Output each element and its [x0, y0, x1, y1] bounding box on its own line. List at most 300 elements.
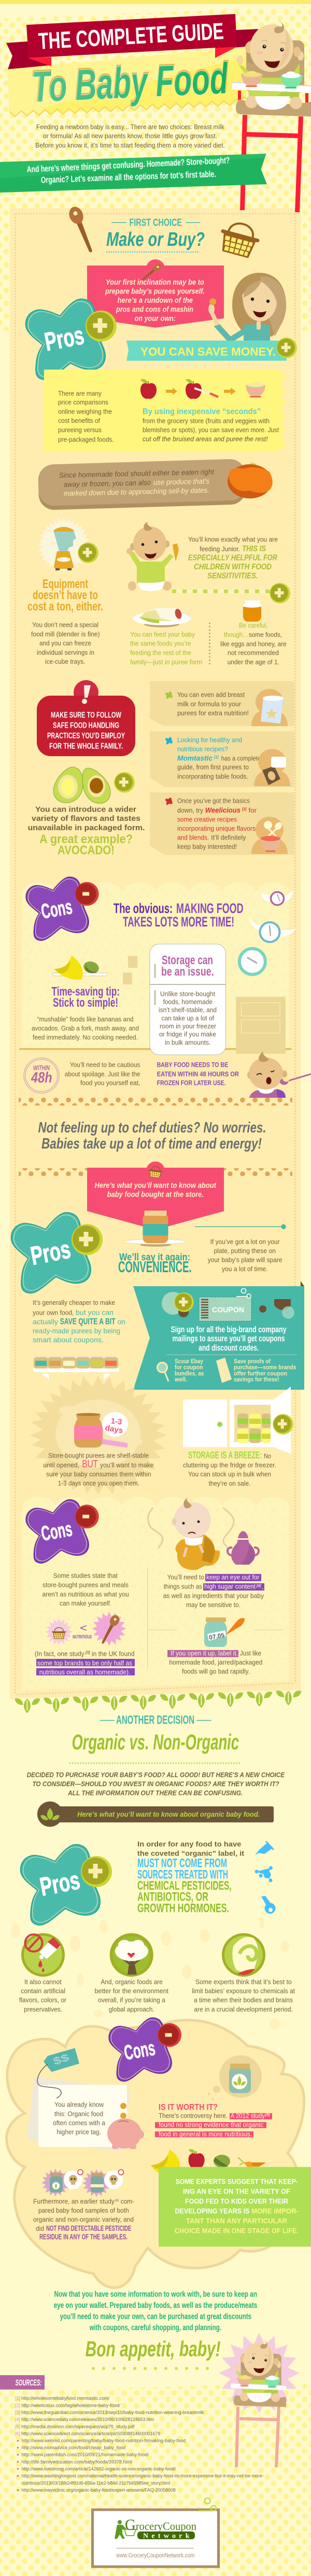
- text: same foods: [130, 631, 202, 666]
- text: food sensitivities: feeding Junior.: [200, 546, 240, 553]
- panel: saving money with seconds: By using inexpensive “seconds”: [143, 407, 261, 416]
- text: is it worth it: There’s controversy here.: [159, 2112, 228, 2119]
- illustration: mom: [208, 273, 286, 342]
- text: is it worth it: [155, 2102, 272, 2138]
- tip box: weelicious: down, try: [177, 807, 204, 814]
- icons: chemical syringe molecule flask: [255, 1841, 276, 1914]
- sources list: http://www.webmd.com/parenting/baby/baby-food-nutrition-9/making-baby-food: [22, 2438, 186, 2443]
- sources list: http://www.sciencedaily.com/releases/2010/06/100628124653.htm: [21, 2417, 154, 2422]
- panel: variety callout: DEVELOPING YEARS IS: [175, 2206, 249, 2215]
- tip box: weelicious: [150, 792, 294, 855]
- panel: variety callout: [151, 2149, 311, 2247]
- text: organic label rules: ANTIBIOTICS, OR: [137, 1890, 208, 1904]
- sources list: http://www.mayoclinic.org/organic-baby-food/expert-answers/FAQ-20058008: [22, 2487, 176, 2493]
- text: sugar content: [4]: [256, 1584, 261, 1588]
- text: save with coupons: on: [118, 1317, 125, 1326]
- panel: saving money with seconds: cost benefits of: [58, 417, 101, 424]
- sources list: http://www.parentdish.com/2010/09/21/homemade-baby-food/: [22, 2452, 149, 2457]
- text: storage is a breeze: No: [264, 1453, 271, 1460]
- text: proofs of purchase: [234, 1359, 296, 1383]
- text: time-saving tip: Stick to simple!: [53, 996, 118, 1010]
- tip box: breast milk: You can even add breast: [177, 691, 245, 699]
- heading: bon appetit: Bon appetit, baby!: [86, 2337, 221, 2361]
- tip box: momtastic: [150, 731, 294, 787]
- sources tab: [0, 2375, 45, 2390]
- heading: not feeling up to chef duties: [38, 1120, 266, 1152]
- text: organic benefits: are in a crucial development period.: [194, 2006, 293, 2013]
- illustration: pantry cupboard: [183, 1387, 293, 1454]
- text: be careful: though...: [224, 631, 248, 639]
- text: storage is a breeze: You can stock up in bulk when: [188, 1471, 271, 1478]
- note: higher price: this: Organic food: [54, 2110, 103, 2117]
- text: convenience: your baby’s plate will spare: [208, 1257, 282, 1264]
- icon: spoon: [67, 204, 97, 255]
- text: storage is a breeze: [183, 1450, 276, 1487]
- panel: saving money with seconds: online weighing the: [58, 408, 112, 415]
- callout: first inclination: pros and cons of mashin: [116, 305, 193, 314]
- text: organic benefits: limit babies’ exposure to chemicals at: [192, 1988, 295, 1995]
- text: same foods: You can feed your baby: [130, 631, 195, 638]
- text: proofs of purchase: offer further coupon: [234, 1371, 287, 1377]
- pros badge 3: Pros: [37, 1865, 82, 1902]
- text: time-saving tip: [32, 984, 139, 1041]
- icon: dinner plate: [133, 608, 191, 627]
- heading: takes more time: MAKING FOOD: [176, 901, 244, 916]
- section title: first choice make or buy: [67, 204, 262, 260]
- sources list: [15, 2396, 264, 2493]
- top yellow bar: [0, 0, 311, 4]
- fridge: storage can be an issue: Storage can: [162, 953, 213, 967]
- icon: banana and avocado on plate: [53, 955, 107, 980]
- text: pesticide study: RESIDUE IN ANY OF THE SAMPLES.: [39, 2233, 128, 2242]
- text: time-saving tip: Time-saving tip:: [52, 984, 120, 998]
- tip box: breast milk: [150, 681, 294, 726]
- pros badge 3: [21, 1845, 112, 1925]
- icon: no additives: [21, 1933, 65, 1977]
- green banner: Organic? Let’s examine all the options for tot’s first table.: [40, 169, 216, 185]
- icon: nutrition comparison: <: [80, 1623, 87, 1634]
- callout: sell-by dates pill: [38, 459, 273, 510]
- cons badge 3: Cons: [122, 2037, 157, 2065]
- callout: first inclination: here’s a rundown of the: [117, 296, 193, 305]
- text: convenience: We’ll say it again:: [119, 1252, 190, 1263]
- text: save with coupons: It’s generally cheaper to make: [33, 1299, 115, 1306]
- icon: blender: [33, 513, 98, 577]
- heading: the complete guide: THE COMPLETE GUIDE: [38, 18, 224, 54]
- text: nutrition study: Some studies state that: [53, 1572, 118, 1580]
- text: same foods: the same foods you’re: [130, 640, 191, 647]
- fridge: storage can be an issue: in bulk amounts.: [165, 1039, 210, 1046]
- text: spoilage: about spoilage. Just like the: [65, 1070, 140, 1078]
- sources list: http://weelicious.com/tag/wholesome-baby-food/: [21, 2403, 120, 2408]
- text: convenience: plate, putting these on: [214, 1247, 276, 1255]
- text: spoilage: [65, 1062, 239, 1087]
- sources list: http://www.livestrong.com/article/142602-organic-vs-non-organic-baby-food/: [22, 2466, 176, 2471]
- text: scour ebay: for coupon: [175, 1365, 203, 1371]
- sources list: [2]: [15, 2403, 20, 2408]
- text: save with coupons: ready-made purees by being: [33, 1327, 120, 1335]
- badge: within 48h: WITHIN: [33, 1064, 50, 1072]
- note: higher price: often comes with a: [53, 2119, 105, 2127]
- fridge: storage can be an issue: Unlike store-bought: [160, 990, 216, 997]
- illustration: jars on shelf: [33, 1355, 119, 1380]
- text: same foods: feeding the rest of the: [130, 649, 191, 656]
- sources list: [6]: [15, 2431, 20, 2436]
- text: organic label rules: In order for any food to have: [137, 1839, 242, 1848]
- callout: first inclination: [87, 259, 224, 328]
- illustration: baby with carrot: [126, 522, 179, 591]
- logo card: [92, 2498, 219, 2567]
- text: wider variety: AVOCADO!: [58, 844, 115, 858]
- text: organic label rules: SOURCES TREATED WITH: [137, 1867, 228, 1881]
- starburst: shelf-stable jar: you’ll want to make: [100, 1462, 154, 1469]
- sources tab: SOURCES:: [16, 2378, 41, 2388]
- text: is it worth it: found no strong evidence that organic: [159, 2122, 263, 2129]
- icon: avocado: [53, 767, 135, 803]
- callout: sell-by dates pill: use produce that’s: [153, 477, 209, 487]
- text: convenience: you a lot of time.: [222, 1265, 268, 1273]
- tip box: momtastic: guide, from first purees to: [177, 764, 249, 771]
- starburst: shelf-stable jar: 1-3 days once you open them.: [58, 1480, 139, 1487]
- tip box: breast milk: purees for extra nutrition!: [177, 710, 249, 717]
- sources list: [1]: [15, 2396, 20, 2401]
- text: organic intro: [27, 1771, 285, 1797]
- text: be careful: some foods,: [249, 631, 282, 639]
- text: organic intro: DECIDED TO PURCHASE YOUR BABY’S FOOD? ALL GOOD! BUT HERE’S A NEW CHOICE: [27, 1771, 285, 1778]
- text: equipment: individual servings in: [37, 649, 94, 656]
- text: closing note: [54, 2290, 257, 2332]
- polka dot header background: [0, 6, 311, 331]
- text: organic benefits: It also cannot: [24, 1978, 62, 1985]
- section title: first choice make or buy: FIRST CHOICE: [130, 217, 182, 229]
- icon: nutrition comparison: NUTRITIOUS: [73, 1635, 92, 1640]
- text: storage is a breeze: STORAGE IS A BREEZE:: [188, 1450, 262, 1461]
- text: equipment: You don’t need a special: [32, 622, 98, 629]
- callout: first inclination: prepare baby’s purees yourself.: [105, 287, 205, 296]
- starburst: shelf-stable jar: days: [104, 1423, 124, 1435]
- text: storage is a breeze: cluttering up the fridge or freezer.: [183, 1462, 276, 1469]
- coupon: [199, 1289, 251, 1321]
- text: scour ebay: Scour Ebay: [175, 1359, 204, 1365]
- text: closing note: with coupons, careful shopping, and planning.: [89, 2323, 221, 2332]
- text: organic label rules: GROWTH HORMONES.: [137, 1901, 229, 1915]
- tip box: weelicious: incorporating unique flavors: [177, 825, 256, 832]
- text: nutrition study: some top brands to be only half as: [37, 1659, 132, 1667]
- fridge: storage can be an issue: can take up a lot of: [162, 1014, 214, 1022]
- text: sugar content: as well as ingredients that your baby: [163, 1592, 264, 1599]
- icon: price tag: [37, 2048, 79, 2098]
- section title: organic vs non-organic: [69, 1713, 241, 1763]
- text: nutrition study: [3]: [85, 1651, 90, 1655]
- text: is it worth it: IS IT WORTH IT?: [159, 2102, 218, 2112]
- text: convenience: [118, 1238, 282, 1276]
- callout: sell-by dates pill: away or frozen, you can also: [64, 478, 151, 489]
- sources list: http://life.familyeducation.com/baby/foods/39378.html: [22, 2459, 132, 2464]
- icon: price tag: $$: [52, 2052, 70, 2068]
- sources list: http://www.washingtonpost.com/national/health-science/organic-baby-food-its-more-expensive-but-it-may-not-be-more-: [22, 2474, 264, 2479]
- fridge: storage can be an issue: [150, 944, 226, 1055]
- text: food sensitivities: THIS IS: [242, 544, 266, 553]
- text: storage is a breeze: they’re on sale.: [209, 1480, 250, 1487]
- heading: to baby food: [30, 53, 230, 111]
- green banner: And here’s where things get confusing. Homemade? Store-bought?: [26, 155, 230, 174]
- icon: fridge background squares: [123, 956, 286, 1054]
- text: save with coupons: but you can: [76, 1308, 114, 1317]
- banner: you can save money: [126, 337, 297, 361]
- text: wider variety: You can introduce a wider: [35, 805, 136, 814]
- cons badge: [26, 877, 99, 940]
- text: wider variety: variety of flavors and tastes: [32, 814, 140, 823]
- text: nutrition study: aren’t as nutritious as what you: [43, 1591, 129, 1598]
- text: sugar content: ,: [262, 1583, 263, 1591]
- text: nutrition study: [35, 1572, 135, 1676]
- tip box: weelicious: some creative recipes: [177, 816, 237, 823]
- fridge: storage can be an issue: foods, homemade: [163, 998, 213, 1006]
- icon: magnifier: [158, 1362, 168, 1381]
- text: be careful: not recommended: [228, 649, 279, 656]
- icon: labeled jar: 07.05: [208, 1631, 225, 1641]
- text: organic benefits: better for the environment: [94, 1988, 169, 1995]
- text: proofs of purchase: purchase—some brands: [234, 1365, 296, 1371]
- icon: honey jar: [243, 600, 261, 622]
- illustration: sad baby: [148, 1497, 234, 1570]
- text: organic label rules: [137, 1839, 244, 1915]
- panel: variety callout: FOOD FED TO KIDS OVER THEIR: [185, 2197, 288, 2205]
- callout: store-bought: baby food bought at the store.: [107, 1190, 204, 1199]
- icon: labeled jar: [204, 1617, 245, 1647]
- panel: coupons: [133, 1281, 304, 1390]
- text: pesticide study: Furthermore, an earlier study: [33, 2198, 115, 2205]
- checked strip with plus: [172, 583, 290, 603]
- starburst: shelf-stable jar: 1-3: [110, 1417, 122, 1426]
- text: sugar content: things such as: [164, 1583, 202, 1591]
- fridge: storage can be an issue: be an issue.: [161, 965, 214, 979]
- text: nutrition study: can make yourself.: [60, 1600, 111, 1607]
- banner: you can save money: YOU CAN SAVE MONEY.: [140, 345, 276, 358]
- pros badge 1: Pros: [42, 320, 87, 357]
- text: is it worth it: [5]: [265, 2113, 270, 2117]
- tip box: weelicious: It’ll definitely: [211, 834, 246, 842]
- icon: thought bubble with organic jar: [207, 2055, 262, 2100]
- text: food sensitivities: ESPECIALLY HELPFUL FOR: [188, 553, 277, 562]
- text: sugar content: You’ll need to: [167, 1574, 204, 1581]
- logo: grocery coupon network: [115, 2515, 196, 2540]
- text: equipment: cost a ton, either.: [27, 599, 103, 613]
- starburst: shelf-stable jar: BUT: [82, 1459, 98, 1470]
- icons: fruits: [151, 2149, 266, 2174]
- tip box: momtastic: nutritious recipes?: [177, 746, 228, 753]
- starburst: shelf-stable jar: [20, 1363, 177, 1507]
- text: scour ebay: [174, 1359, 204, 1383]
- note: higher price: [27, 2048, 144, 2152]
- heading: takes more time: The obvious:: [114, 901, 173, 916]
- main panel: make or buy: [10, 208, 301, 1699]
- text: organic benefits: preservatives.: [24, 2006, 62, 2013]
- callout: safe food handling: FOR THE WHOLE FAMILY.: [49, 742, 123, 751]
- text: food sensitivities: You’ll know exactly what you are: [188, 536, 278, 543]
- icon: nutrition comparison: [46, 1612, 126, 1646]
- panel: variety callout: MORE IMPOR-: [251, 2206, 299, 2215]
- text: equipment: food mill (blender is fine): [31, 630, 100, 638]
- panel: saving money with seconds: price comparisons: [58, 399, 108, 406]
- cons badge: [26, 1500, 99, 1563]
- text: organic benefits: [19, 1978, 295, 2013]
- sources list: [5]: [15, 2424, 20, 2429]
- connector line: [195, 1224, 286, 1229]
- tip box: weelicious: keep baby interested!: [177, 843, 237, 850]
- logo: grocery coupon network: GroceryCoupon: [125, 2515, 196, 2534]
- text: same foods: family—just in puree form: [130, 658, 202, 666]
- text: sugar content: [163, 1574, 264, 1609]
- text: save with coupons: [33, 1299, 125, 1344]
- logo card: www.GroceryCouponNetwork.com: [116, 2553, 194, 2559]
- callout: store-bought: Here’s what you’ll want to know about: [94, 1181, 217, 1190]
- text: sugar content: high sugar content: [204, 1583, 256, 1591]
- callout: safe food handling: [37, 680, 135, 756]
- intro text: Feeding a newborn baby is easy... There are two choices: Breast milk: [36, 123, 224, 130]
- text: nutrition study: in the UK found: [92, 1651, 135, 1658]
- text: pesticide study: did: [36, 2225, 44, 2232]
- callout: safe food handling: SAFE FOOD HANDLING: [53, 722, 119, 730]
- tip box: momtastic: incorporating table foods.: [177, 773, 248, 780]
- pros badge 1: [26, 299, 117, 379]
- panel: variety callout: TANT THAN ANY PARTICULAR: [186, 2217, 287, 2225]
- sources list: [3]: [15, 2410, 20, 2415]
- text: time-saving tip: “mushable” foods like bananas and: [37, 1015, 134, 1023]
- text: convenience: CONVENIENCE.: [118, 1258, 192, 1276]
- cons badge: Cons: [39, 1518, 74, 1545]
- callout: first inclination: Your first inclination may be to: [106, 278, 204, 287]
- icon: baby brain: [222, 1933, 265, 1977]
- text: save with coupons: actually: [33, 1317, 58, 1326]
- tip box: momtastic: [1]: [214, 756, 219, 759]
- text: equipment: Equipment: [43, 577, 88, 591]
- tip box: breast milk: milk or formula to your: [177, 700, 241, 708]
- heading: takes more time: TAKES LOTS MORE TIME!: [123, 914, 234, 930]
- icon: receipt: [216, 1358, 232, 1383]
- text: spoilage: food you yourself eat,: [80, 1080, 140, 1087]
- text: sugar content: keep an eye out for: [206, 1574, 259, 1581]
- callout: first inclination: on your own:: [135, 314, 176, 323]
- text: be careful: [220, 622, 287, 666]
- panel: cons time: [19, 877, 296, 1056]
- text: label it: foods will go bad rapidly.: [182, 1668, 250, 1675]
- pros badge 2: [11, 1213, 103, 1293]
- text: is it worth it: A 2012 study: [231, 2112, 265, 2119]
- callout: safe food handling: MAKE SURE TO FOLLOW: [51, 711, 122, 720]
- title banner: [6, 14, 258, 117]
- text: organic benefits: overall, if you’re taking a: [98, 1997, 165, 2004]
- tip box: weelicious: Weelicious: [205, 806, 241, 814]
- text: spoilage: FROZEN FOR LATER USE.: [157, 1080, 226, 1087]
- callout: sell-by dates pill: marked down due to approaching sell-by dates.: [64, 486, 209, 497]
- intro text: [35, 123, 225, 149]
- text: organic intro: TO CONSIDER—SHOULD YOU INVEST IN ORGANIC FOODS? ARE THEY WORTH IT?: [32, 1780, 279, 1788]
- text: scour ebay: well.: [174, 1377, 187, 1383]
- sources list: http://media.dssimon.com/taperequest/acp75_study.pdf: [21, 2424, 135, 2429]
- starburst: shelf-stable jar: Store-bought purees are shelf-stable: [48, 1452, 149, 1460]
- cons badge: Cons: [39, 895, 74, 923]
- text: organic benefits: Some experts think that it’s best to: [195, 1978, 292, 1985]
- text: save with coupons: SAVE QUITE A BIT: [60, 1316, 116, 1326]
- text: organic benefits: And, organic foods are: [101, 1978, 163, 1985]
- text: save with coupons: your own food,: [33, 1309, 74, 1317]
- text: convenience: If you’ve got a lot on your: [210, 1238, 280, 1245]
- text: pesticide study: (6): [115, 2199, 119, 2202]
- text: nutrition study: (In fact, one study: [35, 1651, 84, 1658]
- text: pesticide study: pared baby food samples of both: [38, 2207, 129, 2214]
- text: sugar content: may be sensitive to.: [186, 1601, 241, 1609]
- intro text: or formula! As all new parents know, those little guys grow fast.: [43, 133, 217, 140]
- text: proofs of purchase: Save proofs of: [234, 1359, 271, 1365]
- icons: jars with skulls: [41, 2169, 123, 2197]
- section title: first choice make or buy: Make or Buy?: [106, 229, 205, 251]
- text: wider variety: A great example?: [39, 832, 133, 846]
- badge: within 48h: [24, 1058, 59, 1093]
- text: spoilage: BABY FOOD NEEDS TO BE: [157, 1062, 228, 1069]
- starburst: shelf-stable jar: until opened,: [43, 1462, 79, 1469]
- text: pesticide study: organic and non-organic variety, and: [33, 2216, 134, 2224]
- text: equipment: ice-cube trays.: [45, 658, 85, 666]
- banner: organic pill: Here’s what you’ll want to know about organic baby food.: [77, 1810, 260, 1818]
- text: label it: homemade food, jarred/packaged: [169, 1659, 262, 1666]
- illustration: baby in high chair: [232, 21, 311, 212]
- icon: piggy bank: [107, 2103, 144, 2149]
- panel: saving money with seconds: There are many: [58, 390, 102, 397]
- text: organic benefits: a time when their bodies and brains: [194, 1997, 293, 2004]
- text: wider variety: [28, 805, 145, 858]
- text: proofs of purchase: savings for these!: [234, 1377, 279, 1383]
- text: organic intro: ALL THE INFORMATION OUT THERE CAN BE CONFUSING.: [67, 1789, 243, 1797]
- heading: takes more time: [114, 901, 244, 930]
- text: organic benefits: global approach.: [109, 2006, 154, 2013]
- icon: pumpkin: [228, 462, 273, 498]
- text: equipment: doesn’t have to: [33, 588, 98, 602]
- tip box: momtastic: Momtastic: [177, 754, 213, 762]
- banner: organic pill: [37, 1801, 274, 1827]
- callout: store-bought: [87, 1161, 224, 1230]
- panel: saving money with seconds: blemishes or spots), you can save even more. Just: [143, 426, 279, 434]
- panel: variety callout: CHOICE MADE IN ONE STAGE OF LIFE.: [175, 2227, 299, 2235]
- icon: scissors: [199, 2498, 216, 2511]
- panel: saving money with seconds: from the grocery store (fruits and veggies with: [143, 417, 270, 424]
- intro text: Before you know it, it’s time to start feeding them a more varied diet.: [35, 142, 225, 149]
- polka dot footer background: [0, 2383, 311, 2576]
- text: pesticide study: [33, 2198, 134, 2242]
- text: spoilage: EATEN WITHIN 48 HOURS OR: [157, 1070, 239, 1078]
- illustration: baby in high chair with burst: [219, 2333, 300, 2467]
- text: label it: [167, 1650, 262, 1675]
- panel: saving money with seconds: pureeing versus: [58, 426, 102, 434]
- sources list: [4]: [15, 2417, 20, 2422]
- note: higher price: You already know: [54, 2101, 104, 2109]
- text: pesticide study: NOT FIND DETECTABLE PESTICIDE: [46, 2225, 132, 2233]
- text: be careful: like eggs and honey, are: [220, 640, 287, 647]
- callout: sell-by dates pill: Since homemade food should either be eaten right: [59, 467, 215, 479]
- coupon: COUPON: [212, 1306, 244, 1315]
- text: equipment: [27, 577, 103, 666]
- text: label it: Just like: [240, 1650, 261, 1657]
- tip box: weelicious: [2]: [242, 807, 247, 812]
- text: organic benefits: flavors, colors, or: [19, 1997, 66, 2004]
- section title: organic vs non-organic: ANOTHER DECISION: [116, 1713, 194, 1727]
- sources list: http://www.sciencedirect.com/science/article/pii/S0308814600001679: [21, 2431, 160, 2436]
- text: nutrition study: store-bought purees and meals: [43, 1582, 129, 1589]
- fridge: storage can be an issue: isn’t shelf-stable, and: [159, 1007, 217, 1014]
- tip box: weelicious: Once you’ve got the basics: [177, 798, 250, 805]
- text: food sensitivities: CHILDREN WITH FOOD: [194, 563, 272, 571]
- tip box: weelicious: and blends.: [177, 834, 209, 842]
